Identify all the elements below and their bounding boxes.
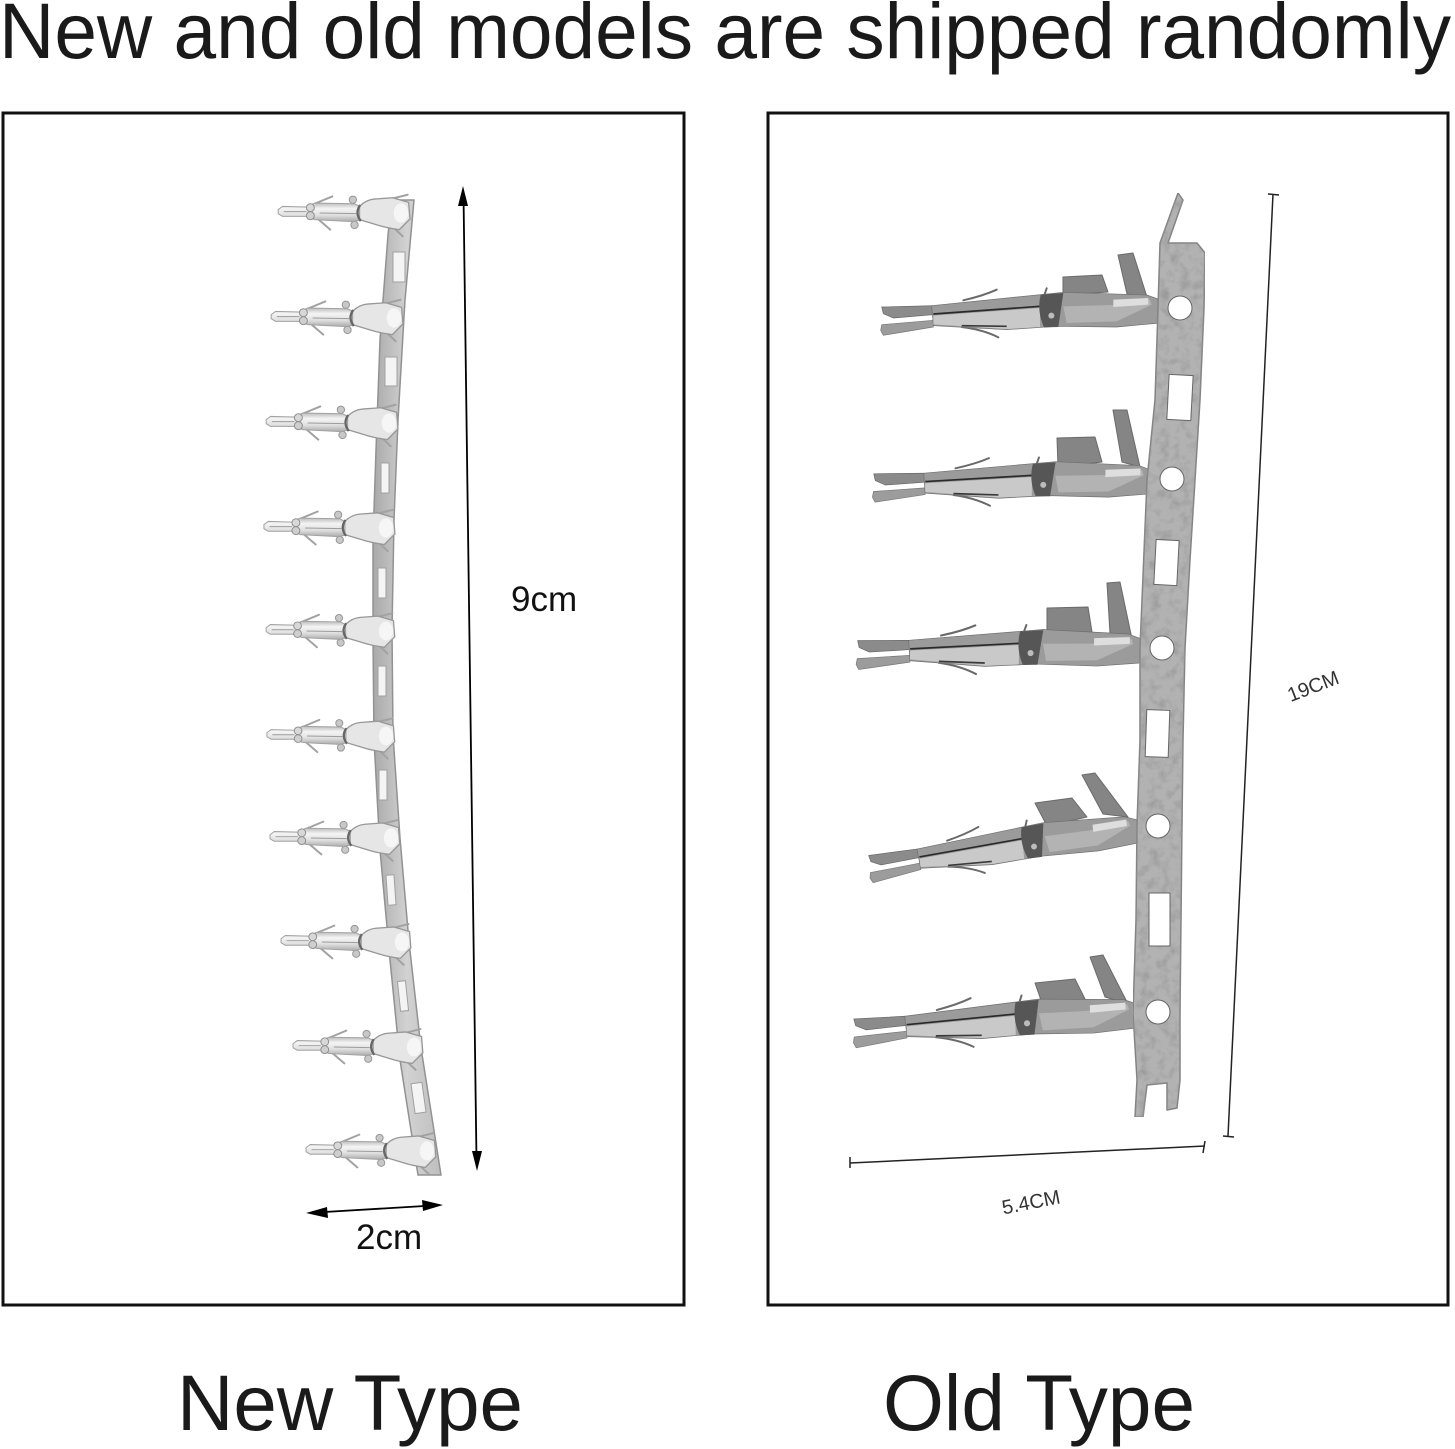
label: 5.4CM: 5.4CM bbox=[1000, 1187, 1062, 1219]
metal carrier strip: new type bbox=[373, 200, 441, 1175]
arrow: 2cm dimension bbox=[306, 1200, 443, 1218]
caption: Old Type: Old Type bbox=[883, 1358, 1195, 1447]
panel: new type bbox=[3, 113, 684, 1305]
arrow: 9cm dimension bbox=[458, 186, 482, 1171]
label: 9cm: 9cm bbox=[511, 580, 577, 619]
label: 2cm: 2cm bbox=[356, 1218, 422, 1257]
dimension line: 19CM bbox=[1223, 194, 1279, 1137]
metal carrier strip: old type bbox=[1133, 193, 1205, 1117]
caption: New Type: New Type bbox=[177, 1358, 523, 1447]
terminal pins: old type bbox=[852, 253, 1160, 1050]
panel: old type bbox=[768, 113, 1448, 1305]
terminal pins: new type bbox=[264, 195, 436, 1174]
label: 19CM: 19CM bbox=[1285, 667, 1342, 707]
dimension line: 5.4CM bbox=[850, 1141, 1205, 1168]
